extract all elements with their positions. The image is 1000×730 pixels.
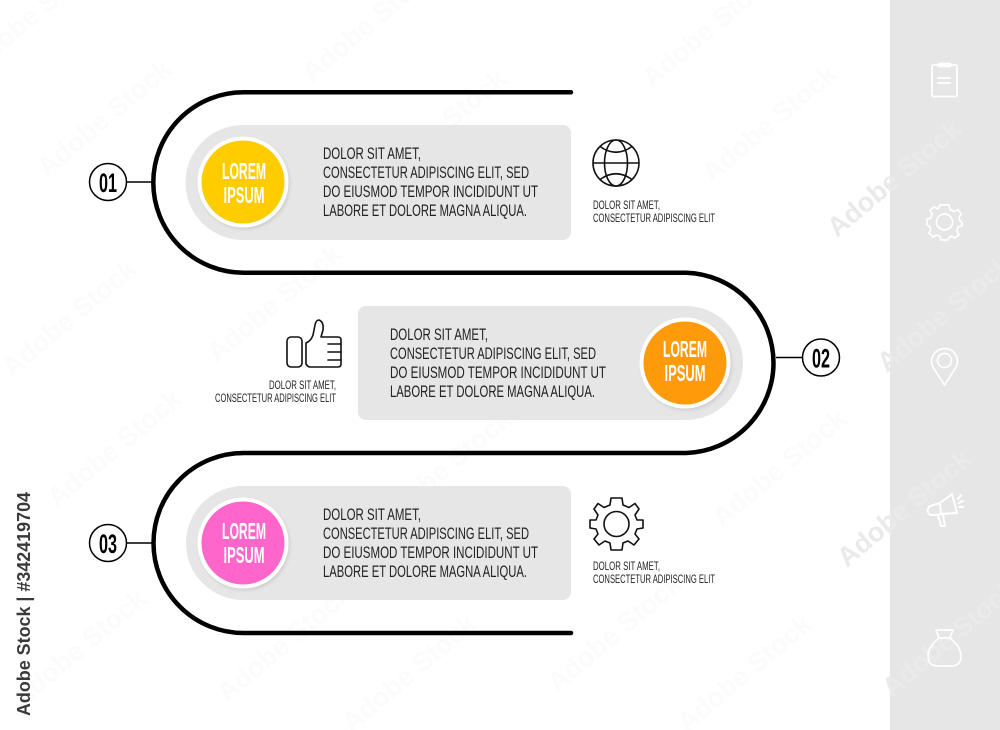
icon: thumbs up	[287, 320, 341, 367]
body text 02: CONSECTETUR ADIPISCING ELIT, SED	[390, 344, 596, 363]
icon: money bag	[928, 630, 961, 666]
body text 01: DOLOR SIT AMET,	[323, 144, 421, 163]
pink circle label: IPSUM	[224, 542, 264, 568]
watermark pattern: Adobe Stock	[541, 568, 688, 698]
body text 01: DO EIUSMOD TEMPOR INCIDIDUNT UT	[323, 182, 538, 201]
number badge 03	[90, 524, 126, 562]
caption 03	[593, 559, 715, 586]
caption 01	[593, 198, 715, 225]
body text 02: DO EIUSMOD TEMPOR INCIDIDUNT UT	[390, 363, 606, 382]
watermark pattern: Adobe Stock	[41, 383, 188, 513]
caption 03: DOLOR SIT AMET,	[593, 559, 660, 573]
panel: step 03 card	[186, 486, 571, 600]
body text 01	[323, 144, 538, 220]
orange circle label	[640, 318, 730, 408]
icon: megaphone	[928, 494, 963, 526]
panel: step 02 card	[358, 306, 743, 420]
connector 01	[127, 181, 153, 183]
body text 03: CONSECTETUR ADIPISCING ELIT, SED	[323, 524, 529, 543]
body text 02: DOLOR SIT AMET,	[390, 325, 488, 344]
step 02	[215, 306, 840, 420]
sidebar icons	[927, 64, 963, 666]
step 03	[90, 486, 715, 600]
icon: clipboard	[932, 64, 957, 96]
icon: globe	[593, 140, 639, 186]
body text 01: LABORE ET DOLORE MAGNA ALIQUA.	[323, 201, 527, 220]
yellow circle label: IPSUM	[224, 182, 264, 208]
watermark pattern: Adobe Stock	[831, 443, 978, 573]
caption 02: DOLOR SIT AMET,	[269, 378, 336, 392]
caption 02	[215, 378, 336, 405]
watermark pattern: Adobe Stock	[6, 583, 153, 713]
watermark pattern: Adobe Stock	[201, 238, 348, 368]
stock id label: Adobe Stock | #342419704	[14, 492, 34, 716]
watermark pattern: Adobe Stock	[366, 63, 513, 193]
body text 03: DO EIUSMOD TEMPOR INCIDIDUNT UT	[323, 543, 538, 562]
watermark pattern: Adobe Stock	[821, 113, 968, 243]
watermark pattern: Adobe Stock	[211, 578, 358, 708]
panel: right sidebar	[890, 0, 1000, 730]
number badge 01	[90, 164, 126, 200]
panel: step 01 card	[185, 125, 571, 240]
body text 02	[390, 325, 606, 401]
body text 03: LABORE ET DOLORE MAGNA ALIQUA.	[323, 562, 527, 581]
watermark pattern: Adobe Stock	[706, 403, 853, 533]
watermark pattern: Adobe Stock	[0, 253, 143, 383]
body text 03: DOLOR SIT AMET,	[323, 505, 421, 524]
body text 02: LABORE ET DOLORE MAGNA ALIQUA.	[390, 382, 595, 401]
icon: settings gear	[927, 205, 962, 240]
caption 03: CONSECTETUR ADIPISCING ELIT	[593, 572, 715, 586]
caption 01: CONSECTETUR ADIPISCING ELIT	[593, 211, 715, 225]
icon: gear	[590, 498, 643, 550]
yellow circle label	[198, 136, 288, 228]
body text 03	[323, 505, 538, 581]
number badge 02: 02	[812, 344, 830, 374]
watermark pattern: Adobe Stock	[31, 53, 178, 183]
orange circle label: LOREM	[663, 336, 707, 362]
pink circle label	[198, 498, 288, 588]
step 01	[90, 125, 715, 240]
number badge 03: 03	[99, 529, 117, 559]
connector 02	[776, 356, 803, 358]
yellow circle label: LOREM	[222, 158, 266, 184]
caption 01: DOLOR SIT AMET,	[593, 198, 660, 212]
watermark pattern: Adobe Stock	[371, 403, 518, 533]
connector 03	[127, 542, 153, 544]
number badge 02	[802, 339, 840, 376]
serpentine track	[153, 92, 773, 633]
number badge 01: 01	[99, 168, 117, 198]
caption 02: CONSECTETUR ADIPISCING ELIT	[215, 391, 336, 405]
body text 01: CONSECTETUR ADIPISCING ELIT, SED	[323, 163, 529, 182]
pink circle label: LOREM	[222, 518, 266, 544]
icon: map pin	[932, 348, 958, 385]
orange circle label: IPSUM	[664, 360, 706, 386]
watermark pattern: Adobe Stock	[696, 58, 843, 188]
